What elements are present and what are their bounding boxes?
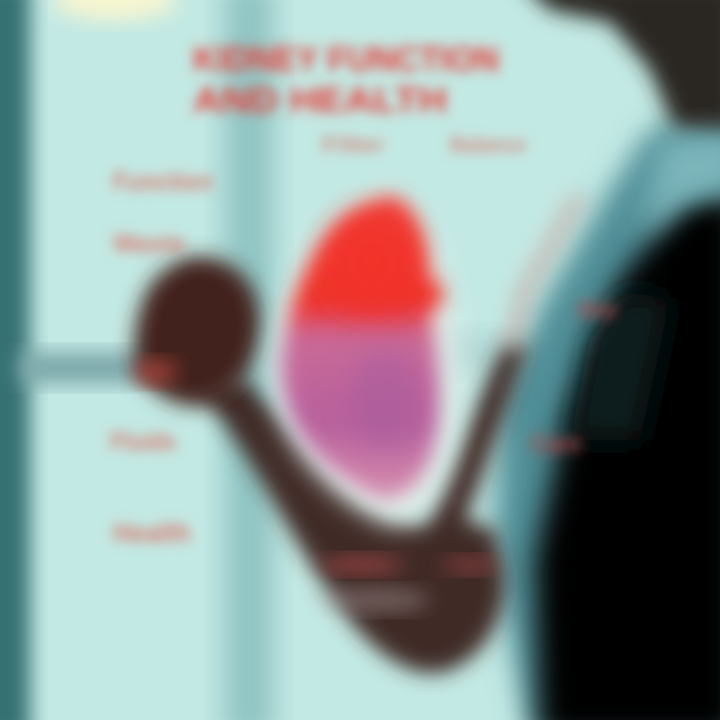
left labels: Function	[113, 166, 213, 196]
left labels: Fluids	[110, 426, 176, 456]
right labels	[530, 297, 616, 458]
left labels: Health	[113, 517, 191, 548]
arm and fist	[133, 257, 528, 673]
left labels	[110, 166, 213, 548]
person silhouette	[495, 0, 720, 720]
pen / thin tool	[510, 195, 580, 350]
right labels: Care	[530, 428, 582, 458]
subtitle labels: Balance	[450, 132, 526, 157]
title	[193, 40, 499, 120]
right labels: Risk	[578, 297, 616, 324]
pale glow around kidney	[275, 195, 458, 525]
left labels: Waste	[113, 228, 185, 258]
title: KIDNEY FUNCTION	[193, 40, 499, 79]
subtitle labels: Filter	[322, 132, 384, 157]
title: AND HEALTH	[193, 81, 447, 120]
subtitle labels	[322, 132, 526, 157]
icon: kidney	[282, 196, 444, 499]
